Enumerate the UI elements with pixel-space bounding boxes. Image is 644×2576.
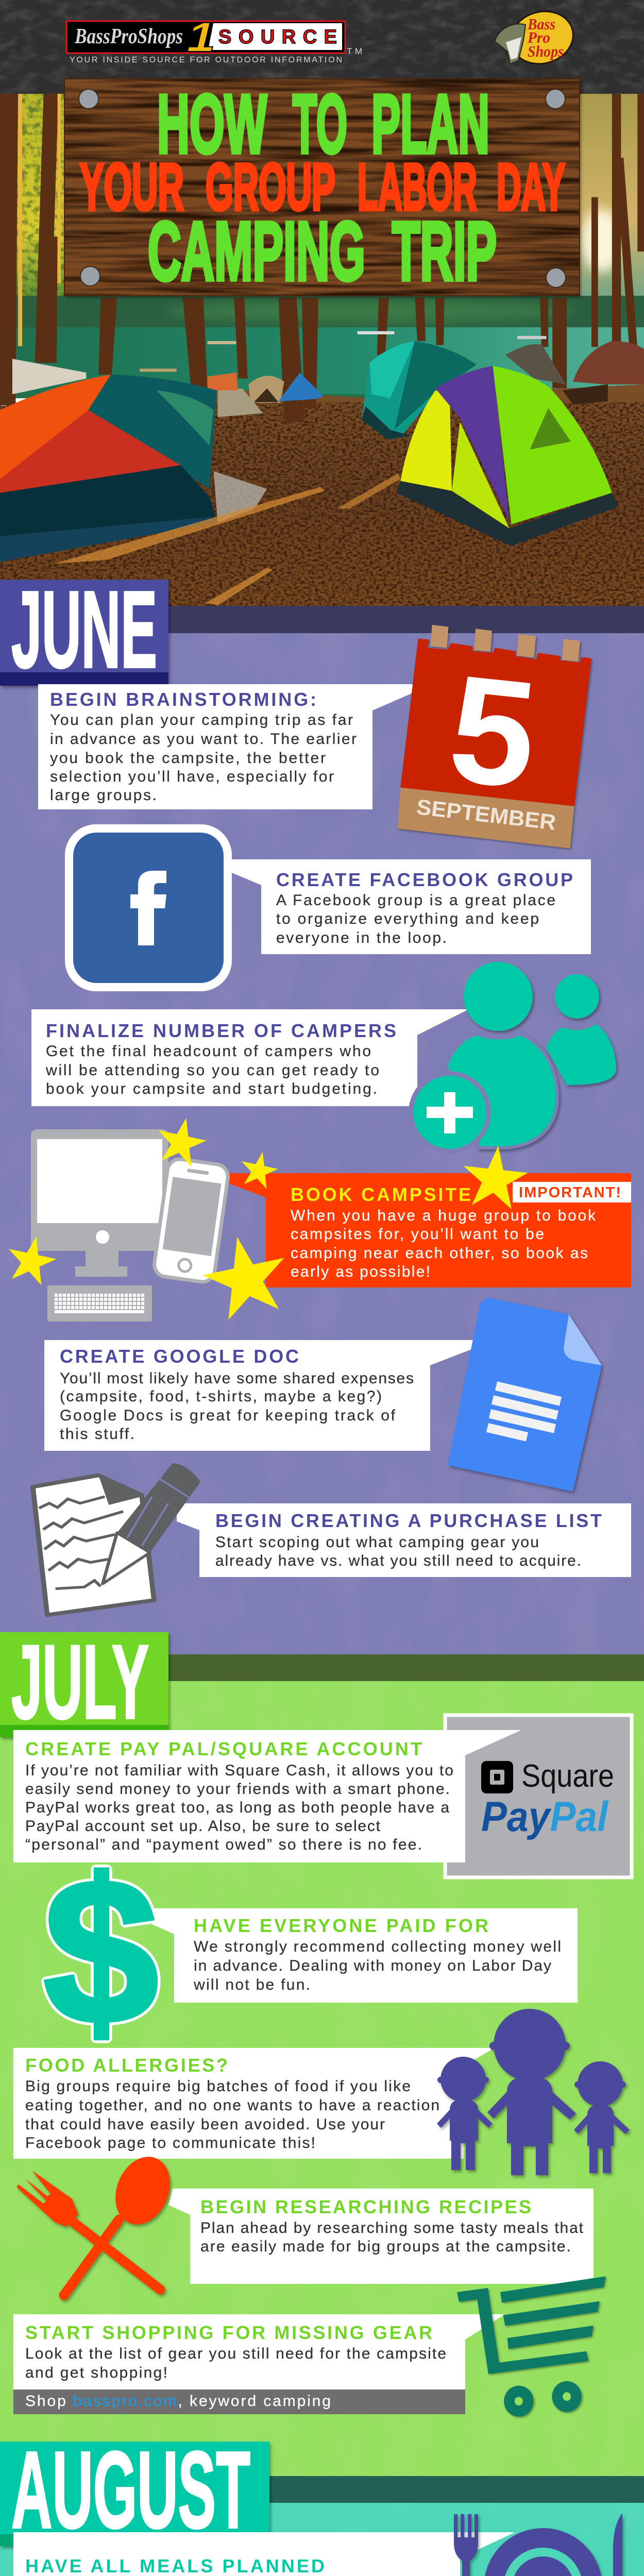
body text: eating together, and no one wants to have a reaction	[25, 2097, 439, 2114]
icon: dollar sign: $	[44, 1836, 158, 2066]
body text: you book the campsite, the better	[50, 750, 326, 767]
month band: June: JUNE	[11, 568, 157, 690]
body text: Big groups require big batches of food if you like	[25, 2078, 411, 2095]
body text: camping near each other, so book as	[291, 1245, 588, 1262]
panel: food allergies: FOOD ALLERGIES?	[25, 2055, 228, 2076]
teal tent	[362, 341, 477, 439]
body text	[193, 1938, 561, 1993]
icon: crossed fork and spoon	[16, 2148, 180, 2295]
shop link strip: Shop basspro.com, keyword camping	[25, 2393, 331, 2410]
panel: begin creating a purchase list	[177, 1503, 631, 1577]
title text: CAMPING	[148, 205, 365, 298]
logo: Bass Pro Shops fish oval: Bass	[527, 15, 555, 33]
body text: that could have easily been avoided. Use your	[25, 2116, 385, 2133]
logo: Bass Pro Shops 1Source: 1	[187, 14, 215, 61]
body text: Facebook page to communicate this!	[25, 2134, 315, 2151]
body text	[25, 2345, 446, 2381]
body text: everyone in the loop.	[276, 929, 447, 946]
logo: Bass Pro Shops 1Source	[66, 14, 362, 64]
callout: important tag	[513, 1182, 631, 1202]
panel: begin researching recipes: BEGIN RESEARCHING RECIPES	[200, 2196, 531, 2217]
logo: PayPal: PayPal	[481, 1793, 609, 1840]
background: June section	[0, 633, 644, 1654]
body text: You’ll most likely have some shared expenses	[60, 1370, 414, 1387]
body text: (campsite, food, t-shirts, maybe a keg?)	[60, 1388, 382, 1405]
body text	[60, 1370, 414, 1443]
body text	[25, 2078, 439, 2151]
title text: GROUP	[206, 150, 335, 224]
icon: people with plus sign	[409, 962, 616, 1154]
body text: PayPal works great too, as long as both people have a	[25, 1799, 449, 1816]
month band: July	[0, 1623, 644, 1741]
logo: Bass Pro Shops fish oval	[495, 5, 579, 71]
background: August section	[0, 2503, 644, 2576]
body text	[50, 711, 357, 804]
body text: will not be fun.	[193, 1976, 310, 1993]
logo: Bass Pro Shops fish oval: Shops	[528, 42, 564, 60]
body text: and get shopping!	[25, 2364, 167, 2381]
icon: yellow stars	[3, 1113, 530, 1323]
body text: in advance. Dealing with money on Labor Day	[194, 1957, 551, 1974]
panel: have everyone paid for	[142, 1908, 578, 2003]
body text: in advance as you want to. The earlier	[50, 731, 357, 748]
panel: begin researching recipes	[168, 2189, 594, 2284]
panel: food allergies	[13, 2048, 495, 2159]
background: July section	[0, 1681, 644, 2476]
body text: book your campsite and start budgeting.	[46, 1080, 377, 1097]
title text: HOW	[157, 78, 267, 171]
panel: book campsite (important): BOOK CAMPSITE	[291, 1184, 471, 1205]
panel: have all meals planned	[13, 2532, 515, 2576]
panel: begin brainstorming	[38, 684, 413, 809]
panel: create Facebook group: CREATE FACEBOOK GROUP	[276, 869, 573, 890]
body text: early as possible!	[291, 1263, 430, 1280]
body text	[215, 1534, 581, 1569]
body text	[45, 1043, 379, 1097]
body text: PayPal account set up. Also, be sure to select	[25, 1818, 381, 1835]
panel: create PayPal / Square account	[13, 1730, 521, 1862]
month band: August: AUGUST	[11, 2429, 250, 2551]
month band: July: JULY	[11, 1623, 149, 1741]
body text: Get the final headcount of campers who	[46, 1043, 371, 1060]
panel: create Google Doc: CREATE GOOGLE DOC	[60, 1346, 299, 1367]
sunlit ground streaks	[54, 487, 325, 564]
body text: campsites for, you’ll want to be	[291, 1226, 544, 1243]
icon: calendar page showing September 5: 5	[442, 642, 544, 821]
body text: are easily made for big groups at the campsite.	[200, 2238, 571, 2255]
icon: desktop computer and smartphone	[31, 1129, 229, 1321]
panel: begin brainstorming: BEGIN BRAINSTORMING:	[50, 689, 316, 710]
lime and purple tent	[400, 391, 452, 491]
body text: Look at the list of gear you still need for the campsite	[25, 2345, 446, 2362]
panel: create PayPal / Square account: CREATE PAY PAL/SQUARE ACCOUNT	[25, 1738, 422, 1759]
body text: If you’re not familiar with Square Cash, it allows you to	[25, 1762, 453, 1779]
hero photo: campsite with tents by a lake	[0, 91, 644, 607]
panel: start shopping for missing gear	[13, 2314, 505, 2414]
month band: June	[0, 568, 644, 690]
logo: Bass Pro Shops 1Source: BassProShops	[74, 25, 183, 48]
panel: have everyone paid for: HAVE EVERYONE PAID FOR	[194, 1915, 488, 1936]
body text: Google Docs is great for keeping track of	[60, 1407, 396, 1424]
title text: YOUR	[80, 150, 184, 224]
icon: calendar page showing September 5	[398, 625, 591, 849]
body text	[291, 1207, 596, 1280]
icon: calendar page showing September 5: SEPTEMBER	[415, 794, 557, 835]
title text	[80, 78, 565, 298]
panel: book campsite (important)	[227, 1173, 631, 1287]
body text: easily send money to your friends with a smart phone.	[25, 1781, 450, 1798]
body text	[276, 892, 555, 946]
panel: create Facebook group	[232, 859, 591, 954]
icon: paper and pencil	[33, 1463, 200, 1615]
title text: DAY	[497, 150, 565, 224]
logo: Square	[481, 1758, 614, 1794]
icon: Square and PayPal logos	[445, 1715, 632, 1877]
panel: have all meals planned: HAVE ALL MEALS PLANNED	[25, 2555, 325, 2576]
icon: Facebook	[65, 824, 232, 991]
panel: create Google Doc	[44, 1340, 473, 1451]
body text	[25, 1762, 453, 1853]
body text: “personal” and “payment owed” so there is no fee.	[25, 1836, 422, 1853]
body text: Start scoping out what camping gear you	[215, 1534, 539, 1551]
title text: LABOR	[358, 150, 477, 224]
panel: begin creating a purchase list: BEGIN CREATING A PURCHASE LIST	[215, 1510, 602, 1531]
title text: TO	[293, 78, 347, 171]
header band	[0, 0, 644, 94]
logo: Square: Square	[521, 1758, 614, 1794]
body text: will be attending so you can get ready to	[45, 1062, 379, 1079]
body text: selection you’ll have, especially for	[50, 768, 334, 785]
logo: Bass Pro Shops 1Source: TM	[347, 46, 362, 56]
logo: Bass Pro Shops 1Source: SOURCE	[218, 26, 337, 48]
panel: finalize number of campers	[31, 1009, 469, 1106]
icon: family silhouette	[437, 2009, 630, 2175]
body text: this stuff.	[60, 1426, 134, 1443]
body text: Plan ahead by researching some tasty meals that	[200, 2219, 584, 2236]
logo: Bass Pro Shops 1Source: YOUR INSIDE SOURCE FOR OUTDOOR INFORMATION	[70, 56, 342, 64]
panel: finalize number of campers: FINALIZE NUMBER OF CAMPERS	[46, 1020, 396, 1041]
background tents	[12, 359, 86, 394]
icon: shopping cart	[458, 2276, 606, 2417]
body text: large groups.	[50, 787, 157, 804]
body text: already have vs. what you still need to acquire.	[215, 1552, 581, 1569]
body text: We strongly recommend collecting money well	[194, 1938, 561, 1955]
title text: TRIP	[392, 205, 497, 298]
body text	[200, 2219, 584, 2255]
orange and teal tent	[0, 375, 111, 481]
icon: plate with fork and knife	[454, 2513, 626, 2576]
icon: dollar sign: $	[44, 1836, 158, 2066]
body text: to organize everything and keep	[276, 910, 539, 927]
title sign: wooden board	[64, 78, 580, 298]
title text: PLAN	[371, 78, 489, 171]
callout: important tag: IMPORTANT!	[519, 1184, 621, 1201]
body text: When you have a huge group to book	[291, 1207, 596, 1224]
panel: start shopping for missing gear: START SHOPPING FOR MISSING GEAR	[25, 2322, 432, 2343]
body text: A Facebook group is a great place	[276, 892, 555, 909]
body text: You can plan your camping trip as far	[50, 711, 353, 728]
logo: Bass Pro Shops fish oval: Pro	[527, 28, 550, 46]
icon: Google Docs document	[448, 1297, 602, 1492]
